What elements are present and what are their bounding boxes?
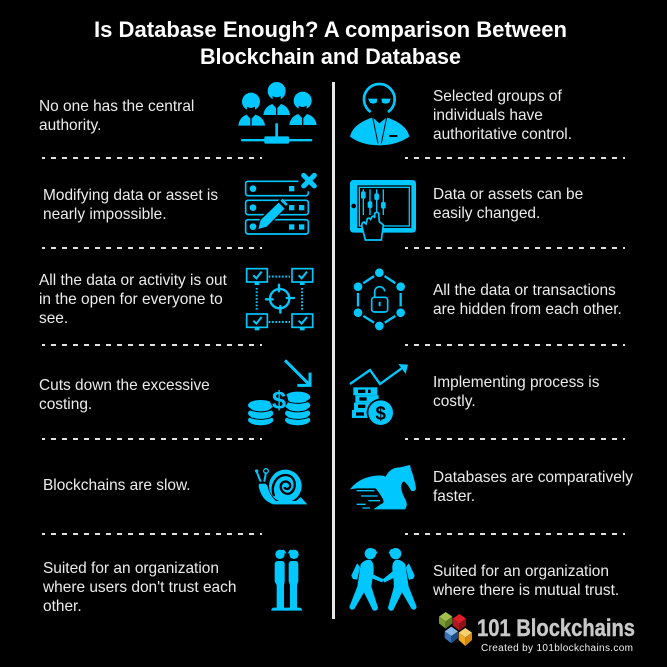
- text: blockchains slow: Blockchains are slow.: [43, 477, 191, 494]
- icon: tablet with sliders and hand: [350, 180, 416, 240]
- text: costly process: Implementing process is: [433, 374, 600, 391]
- title: [94, 17, 567, 69]
- text: costly process: costly.: [433, 393, 476, 410]
- text: suited mutual trust: Suited for an organization: [433, 563, 609, 580]
- text: modifying data: nearly impossible.: [43, 206, 167, 223]
- icon: two people shaking hands: [350, 549, 416, 610]
- text: cuts costing: costing.: [39, 396, 92, 413]
- text: cuts costing: Cuts down the excessive: [39, 377, 210, 394]
- icon: rising chart over money: $: [375, 402, 386, 423]
- text: modifying data: Modifying data or asset is: [43, 187, 218, 204]
- text: blockchain central authority: authority.: [39, 117, 101, 134]
- icon: coins and down arrow: $: [272, 387, 286, 415]
- text: hidden data: All the data or transactions: [433, 282, 616, 299]
- icon: running horse: [350, 465, 416, 509]
- icon: rising chart over money: [350, 364, 408, 427]
- title: Blockchain and Database: [200, 44, 461, 69]
- text: blockchain central authority: No one has the central: [39, 98, 194, 115]
- icon: snail: [255, 469, 307, 504]
- icon: two people back to back: [271, 550, 302, 611]
- icon: agent with sunglasses: [350, 84, 409, 145]
- text: selected groups: authoritative control.: [433, 126, 572, 143]
- text: suited mutual trust: where there is mutual trust.: [432, 582, 619, 599]
- text: easily changed: Data or assets can be: [433, 186, 583, 203]
- text: suited no trust: Suited for an organization: [43, 560, 219, 577]
- text: hidden data: are hidden from each other.: [433, 301, 622, 318]
- icon: people on a network: [238, 82, 317, 144]
- title: Is Database Enough? A comparison Between: [94, 17, 567, 42]
- text: suited no trust: where users don't trust each: [42, 579, 236, 596]
- icon: server stack with pencil and cross: [246, 170, 320, 234]
- text: databases faster: Databases are comparatively: [433, 469, 633, 486]
- centre divider: [332, 82, 335, 619]
- text: open data: All the data or activity is out: [39, 272, 228, 289]
- icon: connected monitors with target: [247, 269, 313, 330]
- text: selected groups: Selected groups of: [433, 88, 562, 105]
- logo: 101 Blockchains: Created by 101blockchains.com: [481, 643, 633, 654]
- text: open data: see.: [39, 310, 68, 327]
- icon: coloured cubes: [439, 612, 472, 646]
- icon: coins and down arrow: [248, 360, 310, 425]
- text: databases faster: faster.: [433, 488, 475, 505]
- text: easily changed: easily changed.: [433, 205, 540, 222]
- text: suited no trust: other.: [43, 598, 82, 615]
- icon: hexagon network with open lock: [353, 267, 406, 331]
- logo: 101 Blockchains: [439, 612, 635, 654]
- text: selected groups: individuals have: [433, 107, 543, 124]
- text: open data: in the open for everyone to: [39, 291, 223, 308]
- logo: 101 Blockchains: 101 Blockchains: [477, 615, 635, 642]
